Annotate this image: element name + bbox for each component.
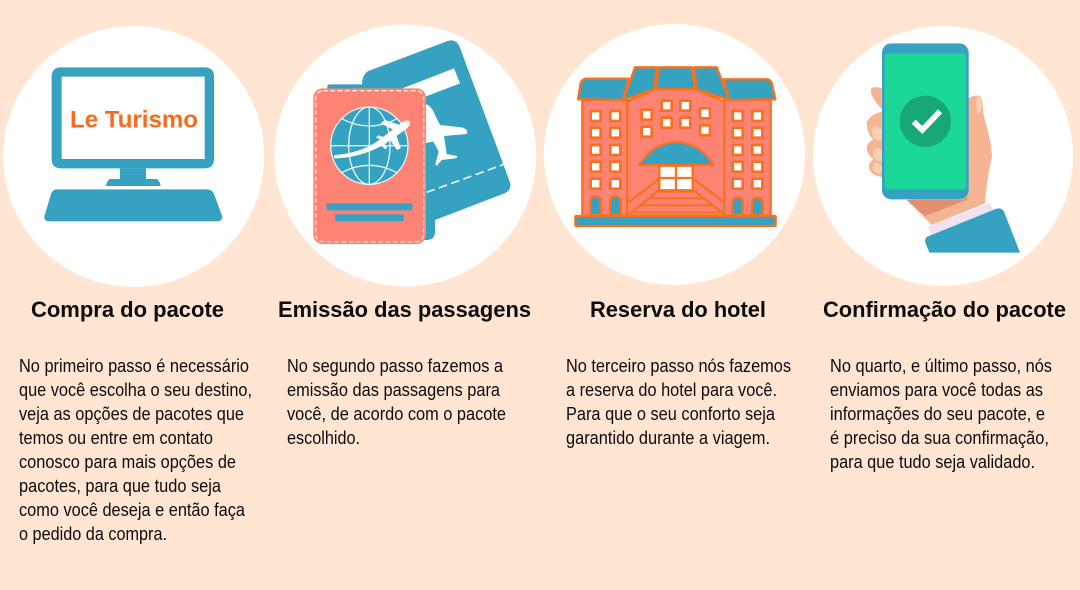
text block: step 3 — [566, 356, 791, 448]
text block: step 4: enviamos para você todas as — [830, 380, 1043, 400]
panel: step 1 icon, computer — [3, 26, 264, 287]
text block: step 1: pacotes, para que tudo seja — [19, 476, 222, 496]
text block: step 4: No quarto, e último passo, nós — [830, 356, 1052, 376]
text block: step 2: No segundo passo fazemos a — [287, 356, 504, 376]
text block: step 2: emissão das passagens para — [287, 380, 501, 400]
text block: step 2 — [287, 356, 506, 448]
icon: passport and boarding pass — [313, 40, 510, 244]
icon: hotel building — [575, 67, 776, 226]
heading: step 1: Compra do pacote — [31, 297, 224, 322]
text block: step 1: que você escolha o seu destino, — [19, 380, 252, 400]
text block: step 1: temos ou entre em contato — [19, 428, 213, 448]
text block: step 4 — [830, 356, 1052, 472]
text block: step 1 — [19, 356, 252, 544]
passport cover — [313, 88, 426, 244]
panel: step 3 icon, hotel — [544, 24, 805, 285]
brand text: Le Turismo — [70, 108, 198, 134]
text block: step 4: é preciso da sua confirmação, — [830, 428, 1049, 448]
shirt cuff and sleeve — [925, 203, 1020, 253]
panel: step 4 icon, phone in hand — [813, 26, 1073, 286]
entrance and stairs — [629, 142, 724, 214]
heading: step 2: Emissão das passagens — [278, 297, 531, 322]
arched doors — [590, 196, 763, 215]
text block: step 1: conosco para mais opções de — [19, 452, 236, 472]
text block: step 2: você, de acordo com o pacote — [287, 404, 506, 424]
text block: step 4: informações do seu pacote, e — [830, 404, 1045, 424]
icon: computer monitor and keyboard — [44, 67, 222, 221]
text block: step 3: a reserva do hotel para você. — [566, 380, 777, 400]
text block: step 1: No primeiro passo é necessário — [19, 356, 249, 376]
globe with plane — [331, 107, 410, 184]
text block: step 3: garantido durante a viagem. — [566, 428, 770, 448]
heading: step 3: Reserva do hotel — [590, 297, 766, 322]
text block: step 1: como você deseja e então faça — [19, 500, 246, 520]
text block: step 4: para que tudo seja validado. — [830, 452, 1035, 472]
text block: step 1: o pedido da compra. — [19, 524, 167, 544]
panel: step 2 icon, passport and ticket — [274, 24, 536, 286]
icon: hand holding phone with check — [867, 43, 1020, 253]
hand — [867, 87, 992, 225]
heading: step 4: Confirmação do pacote — [823, 297, 1066, 322]
text block: step 2: escolhido. — [287, 428, 360, 448]
text block: step 3: No terceiro passo nós fazemos — [566, 356, 791, 376]
roofs — [578, 67, 775, 100]
boarding pass — [327, 40, 510, 240]
text block: step 1: veja as opções de pacotes que — [19, 404, 244, 424]
text block: step 3: Para que o seu conforto seja — [566, 404, 776, 424]
phone — [882, 43, 969, 199]
windows — [591, 101, 762, 189]
